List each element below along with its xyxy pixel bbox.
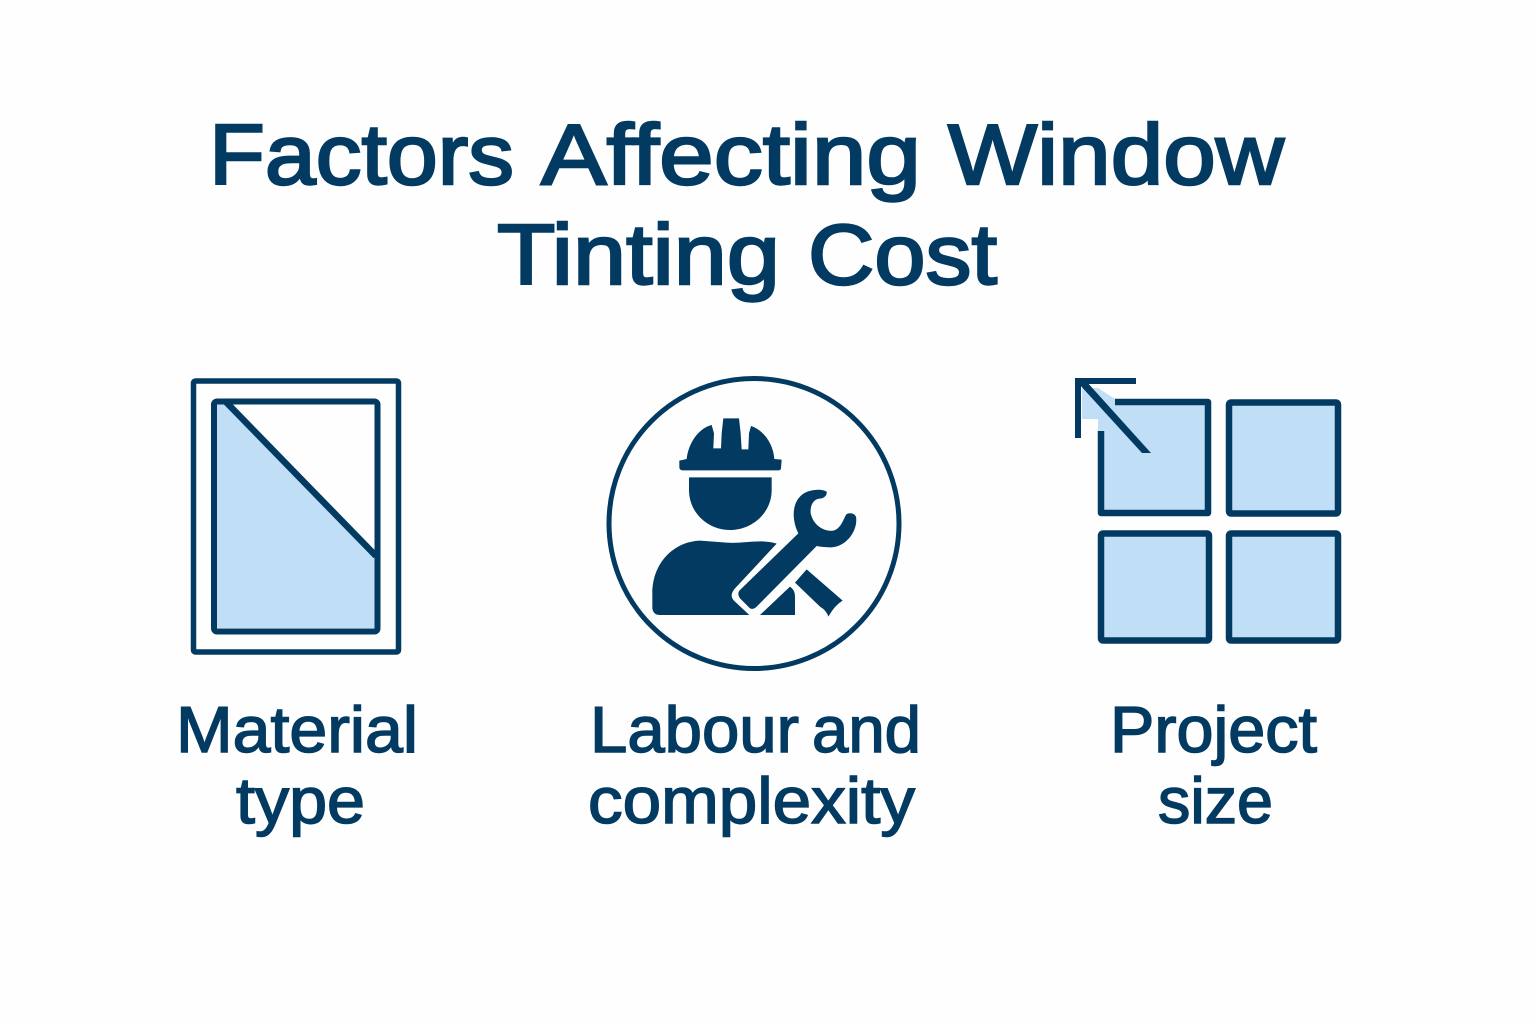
label: labour and complexity <box>588 693 921 837</box>
icon: window grid with arrow <box>1078 381 1338 640</box>
title <box>209 108 1285 303</box>
label: material type: Material <box>176 693 418 766</box>
label: material type: type <box>236 764 365 837</box>
title: Tinting <box>497 208 780 303</box>
title: Affecting <box>541 108 921 203</box>
label: labour and complexity: and <box>812 693 921 766</box>
panel: material type <box>176 381 418 837</box>
label: labour and complexity: complexity <box>588 764 916 837</box>
label: labour and complexity: Labour <box>590 693 799 766</box>
label: project size: size <box>1158 764 1273 837</box>
panel: labour and complexity <box>588 378 921 837</box>
icon: worker with wrench <box>609 378 899 668</box>
label: project size <box>1110 693 1317 837</box>
panel: project size <box>1078 381 1338 837</box>
title: Cost <box>808 208 997 303</box>
title: Window <box>948 108 1285 203</box>
label: project size: Project <box>1110 693 1317 766</box>
label: material type <box>176 693 418 837</box>
title: Factors <box>209 108 514 203</box>
icon: tinted window <box>194 381 398 652</box>
